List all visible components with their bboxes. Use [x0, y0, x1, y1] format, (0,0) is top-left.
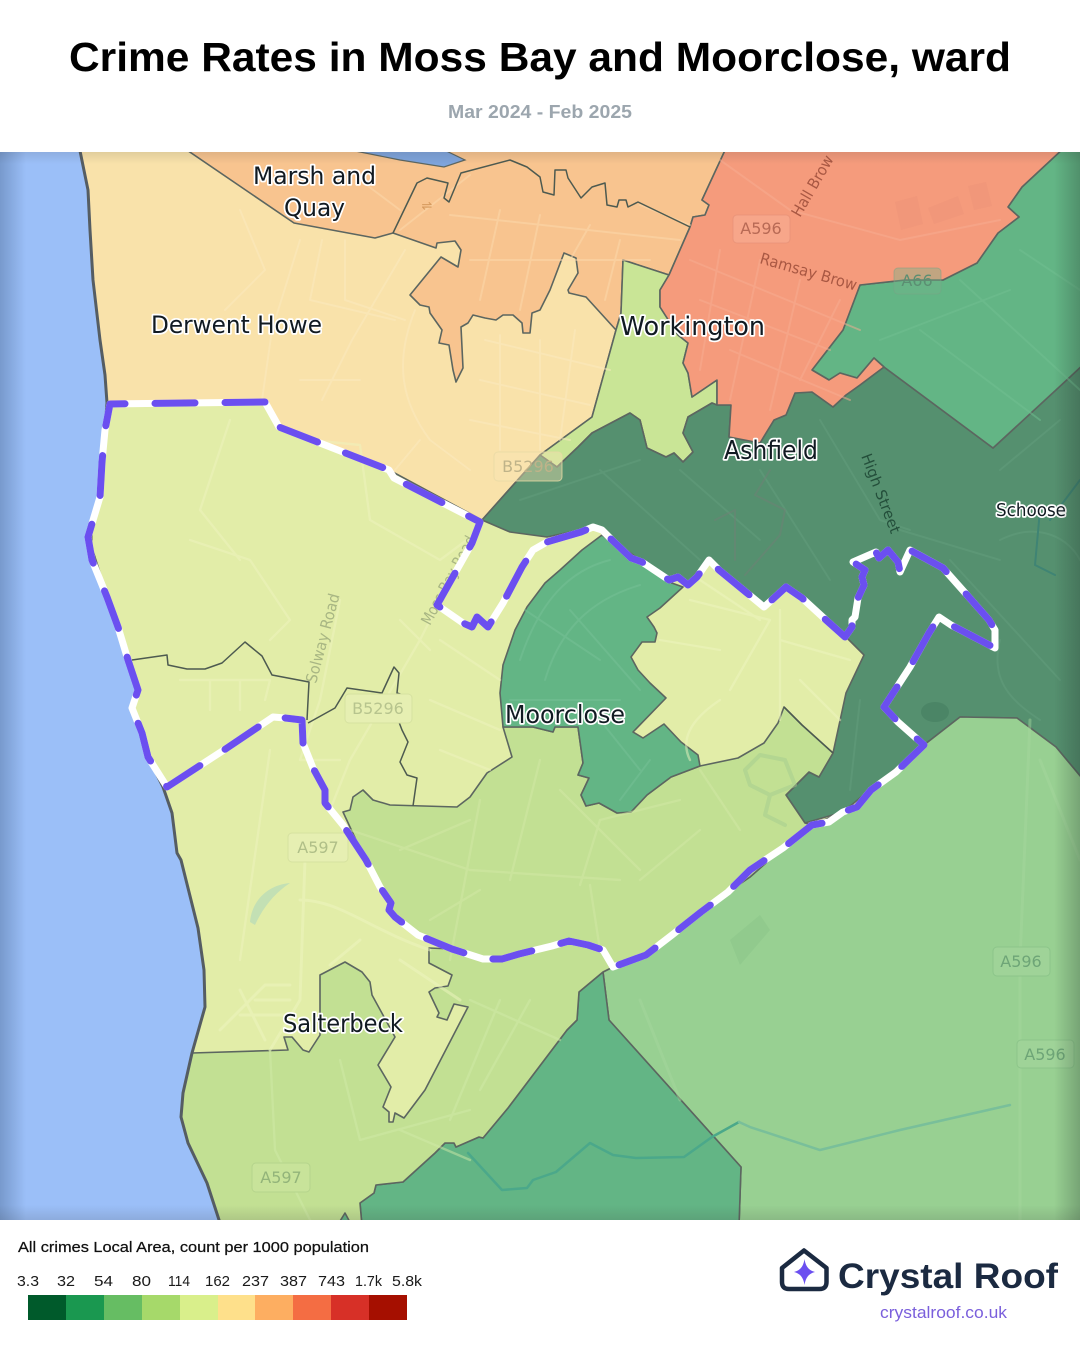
region: southern mid green: [360, 972, 741, 1226]
ward outline white casing: [88, 402, 995, 967]
region: south Salterbeck light green: [181, 941, 613, 1226]
region: Moorclose mid green: [500, 535, 700, 813]
ward outline purple dashes: [88, 402, 995, 967]
region: Moorclose central light green: [343, 707, 833, 967]
pond in south-east: [730, 915, 770, 965]
legend scale values: 743: [318, 1273, 345, 1290]
stream upper right: [1035, 480, 1080, 575]
place label: Marsh and Quay: [253, 162, 376, 222]
road name: High Street: High Street: [857, 451, 904, 536]
subtitle: date range: Mar 2024 - Feb 2025: [448, 101, 632, 122]
roundel roads: [745, 755, 795, 825]
boundary: north-east of ward west: [132, 642, 309, 720]
region: Marsh and Quay: [192, 152, 724, 380]
faint road network: [180, 160, 1080, 1220]
roads: south green: [270, 1000, 560, 1220]
icon: house with star: [782, 1250, 826, 1289]
salmon region building blocks: [895, 182, 992, 230]
title: Crime Rates in Moss Bay and Moorclose, ward: [69, 34, 1011, 80]
badge: A596 north: [733, 215, 790, 243]
place label: Salterbeck: Salterbeck: [283, 1009, 403, 1038]
streams: [468, 1122, 739, 1190]
south-east tracks: [676, 718, 1032, 1102]
boundary: B5296 block: [308, 667, 417, 806]
place label: Moorclose: Moorclose: [505, 700, 625, 729]
badge: A597 north: A597: [297, 838, 339, 857]
roads: central green: [350, 760, 740, 960]
water: sea: [0, 152, 218, 1220]
region: tiny south edge green: [340, 1212, 350, 1220]
region: south-east light green: [603, 717, 1080, 1226]
roads: Salterbeck: [220, 860, 460, 1050]
roads: pale east lobe: [660, 580, 850, 760]
legend scale values: 54: [94, 1273, 113, 1290]
ward boundary: Moss Bay and Moorclose: [88, 402, 995, 967]
roads: Ashfield: [520, 420, 1080, 790]
badge: A597 north: [288, 833, 348, 862]
badge: A596 south-east: [1017, 1040, 1074, 1068]
badge: A596 north: A596: [740, 219, 782, 238]
boundary: pale lobe south edge: [784, 707, 833, 753]
region: north-east green: [812, 146, 1080, 448]
badge: A596 south-east: A596: [1024, 1045, 1066, 1064]
place label: Marsh and Quay: Marsh and: [253, 162, 376, 190]
pond dark: [921, 702, 949, 722]
legend scale values: 114: [168, 1273, 190, 1290]
badge: B5296 south: B5296: [352, 699, 404, 718]
legend scale values: 387: [280, 1273, 307, 1290]
internal ward boundaries: [132, 160, 833, 806]
legend scale values: 32: [57, 1273, 75, 1290]
road: brown-grey track: [715, 470, 785, 575]
legend scale values: 237: [242, 1273, 269, 1290]
legend scale values: 80: [132, 1273, 151, 1290]
harbour water: [357, 152, 466, 168]
badge: B5296 north: B5296: [502, 457, 554, 476]
pond: [250, 883, 290, 925]
road name: Moss Bay Road: Moss Bay Road: [418, 533, 480, 628]
road name: Hall Brow: Hall Brow: [788, 152, 838, 220]
badge: B5296 north: [494, 452, 562, 481]
website: crystalroof.co.uk: [880, 1304, 1008, 1322]
legend scale values: 3.3: [17, 1273, 39, 1290]
place label: Schoose: Schoose: [996, 500, 1066, 521]
region: Ashfield (dark green): [482, 362, 1080, 823]
roads: Moorclose mid green: [510, 560, 650, 800]
roads: Derwent Howe: [225, 210, 610, 470]
region: Derwent Howe: [79, 146, 616, 520]
railway station icon: ⇌: [422, 199, 433, 214]
stream in light green: [739, 1105, 1010, 1150]
boundary: station zig-zag in Marsh and Quay: [393, 160, 690, 233]
legend title: All crimes Local Area, count per 1000 population: [18, 1239, 369, 1256]
legend colour swatches: [28, 1295, 407, 1320]
road name: Ramsay Brow: Ramsay Brow: [758, 250, 859, 294]
map edge vignette: [0, 152, 1080, 1220]
badge: A66: A66: [901, 271, 933, 290]
coastline: [79, 146, 221, 1226]
land base: Moss Bay area: [92, 406, 863, 1122]
region: Workington centre (salmon): [660, 146, 1066, 443]
legend scale values: 5.8k: [392, 1273, 423, 1290]
logo: Crystal Roof: [782, 1250, 1058, 1322]
roads: Marsh and Quay: [360, 175, 690, 310]
legend scale values: 1.7k: [355, 1273, 382, 1290]
wordmark: Crystal Roof: [838, 1257, 1058, 1296]
region: Workington: [540, 260, 717, 467]
place label: Workington: Workington: [620, 312, 765, 342]
place label: Marsh and Quay: Quay: [284, 194, 345, 222]
badge: A597 south: [252, 1163, 310, 1192]
roads: salmon centre: [690, 160, 1000, 410]
badge: A596 east: [993, 947, 1050, 976]
place label: Derwent Howe: Derwent Howe: [151, 311, 322, 339]
legend scale values: [17, 1273, 423, 1290]
badge: B5296 south: [345, 694, 412, 723]
roads: ward west: [180, 420, 500, 960]
road name: Solway Road: Solway Road: [302, 592, 344, 685]
badge: A596 east: A596: [1000, 952, 1042, 971]
badge: A66: [894, 268, 941, 294]
badge: A597 south: A597: [260, 1168, 302, 1187]
legend: [17, 1239, 423, 1320]
road badges: [252, 215, 1074, 1192]
legend scale values: 162: [205, 1273, 230, 1290]
choropleth map: [0, 146, 1080, 1226]
roads: north-east green: [1030, 378, 1080, 421]
place label: Ashfield: Ashfield: [724, 436, 818, 466]
